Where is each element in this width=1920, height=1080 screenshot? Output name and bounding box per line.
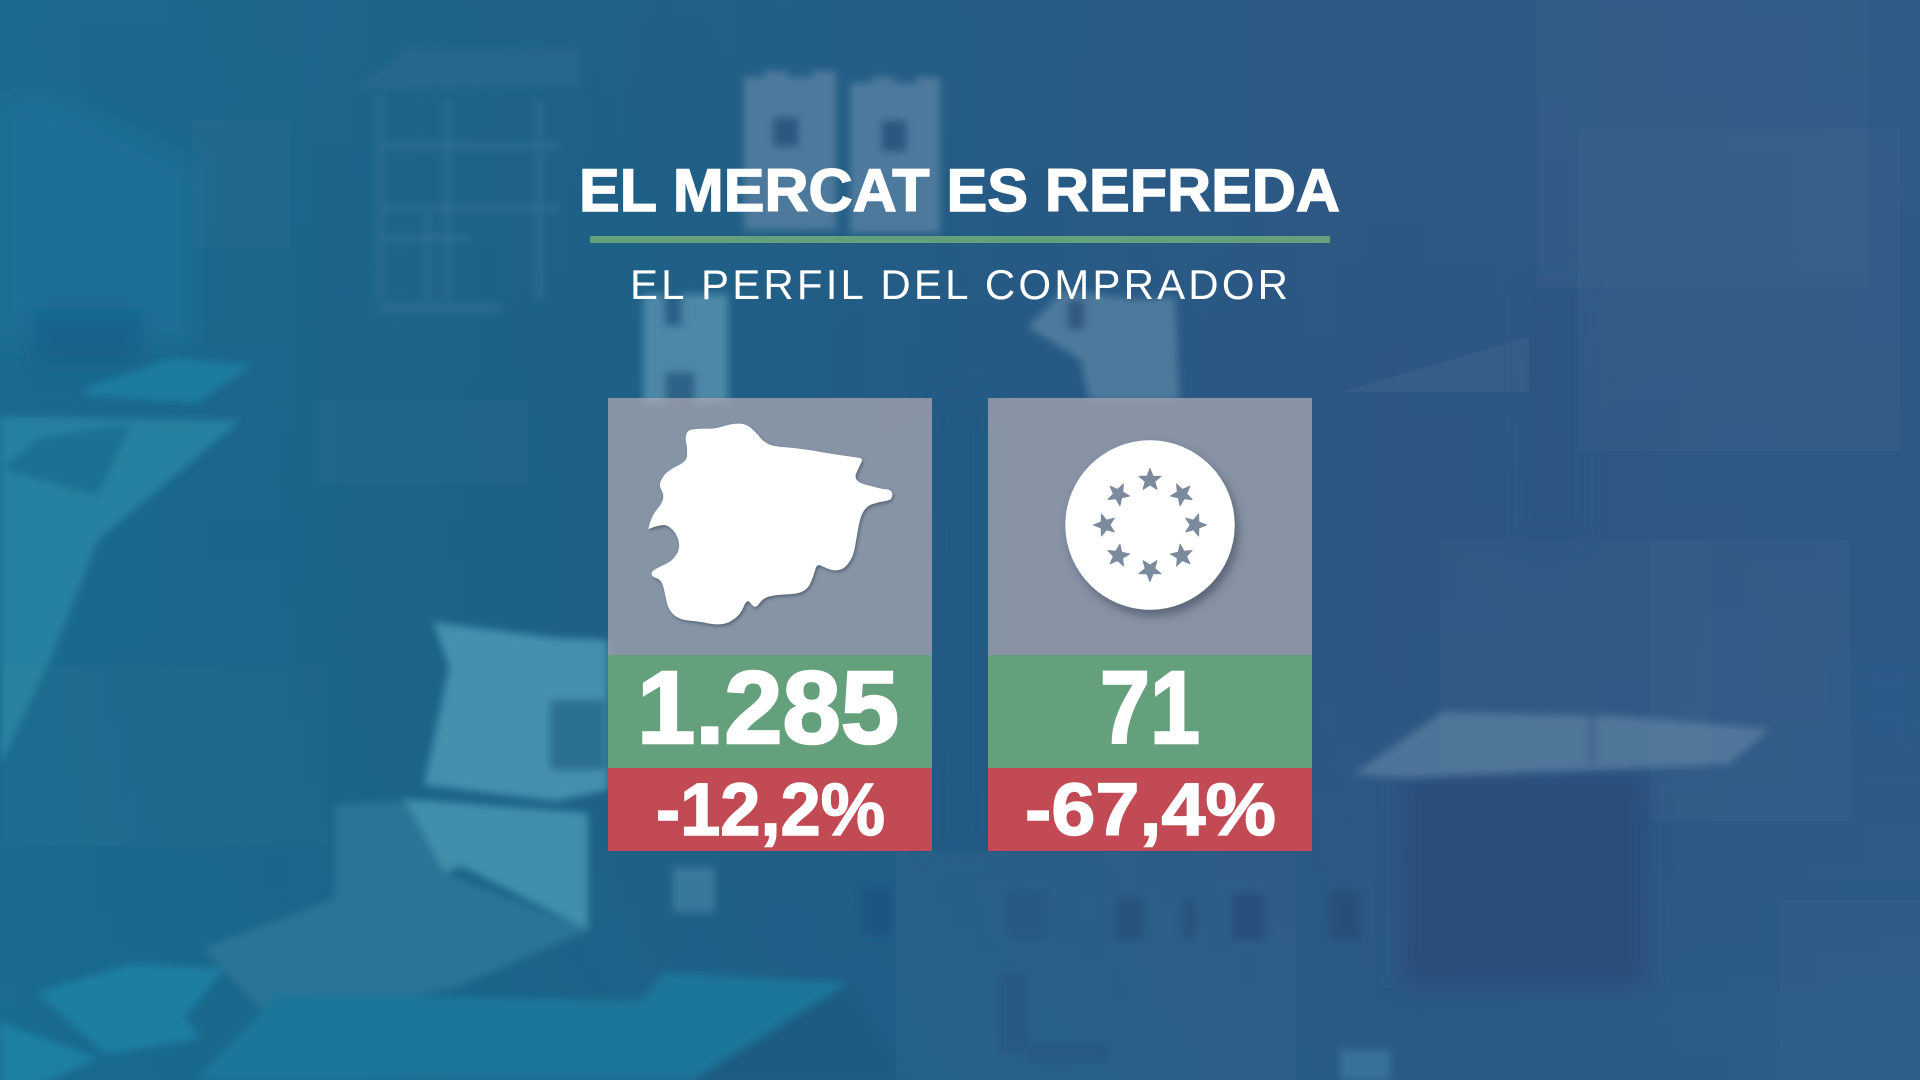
panel background <box>608 398 932 655</box>
icon: EU circle with stars <box>1065 440 1235 610</box>
change: -12,2%: -12,2% <box>656 768 885 851</box>
subtitle: EL PERFIL DEL COMPRADOR <box>630 261 1288 308</box>
panel: Andorra <box>608 398 932 851</box>
title divider rule <box>590 236 1330 243</box>
panel: European Union <box>988 398 1312 851</box>
icon: map of Andorra <box>648 424 892 624</box>
big number: 1.285: 1.285 <box>637 650 899 765</box>
big number: 71: 71 <box>1100 650 1200 765</box>
title: EL MERCAT ES REFREDA <box>579 157 1340 224</box>
change: -67,4%: -67,4% <box>1025 768 1276 851</box>
panel background <box>988 398 1312 655</box>
big number: 71 <box>988 650 1312 768</box>
